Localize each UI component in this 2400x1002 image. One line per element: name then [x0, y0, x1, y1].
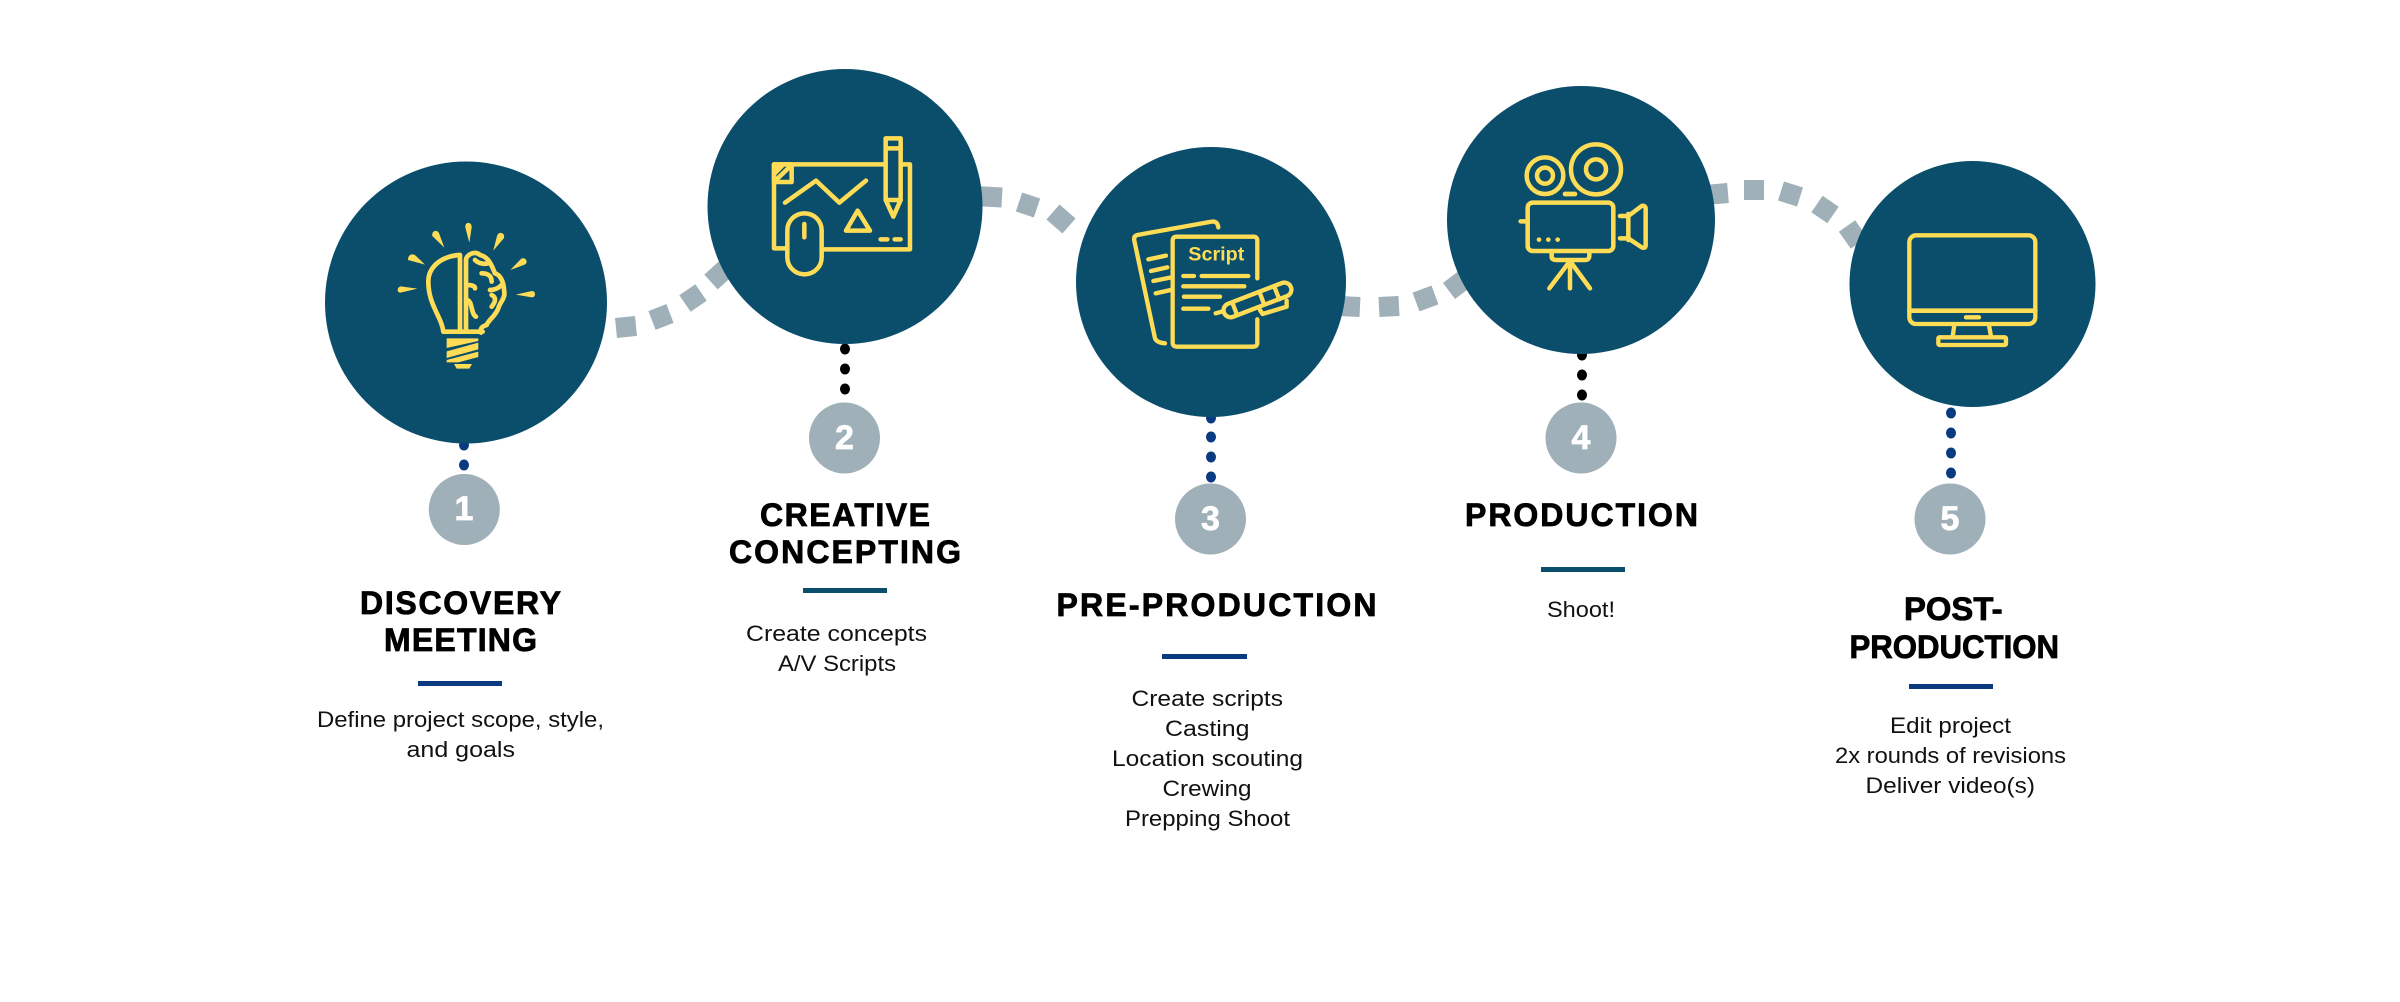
rule: step 4 — [1541, 567, 1625, 572]
number badge: 2 — [809, 402, 880, 474]
text block: step 1 description: Define project scope, style, — [317, 707, 604, 732]
text block: step 3 description: Crewing — [1162, 776, 1252, 801]
text block: step 1 description: and goals — [406, 737, 515, 762]
icon: design board with pencil and mouse — [774, 138, 910, 274]
dotted line: step 5 — [1946, 408, 1956, 478]
text block: step 3 description: Create scripts — [1132, 686, 1283, 711]
rule: step 3 — [1162, 654, 1247, 659]
icon: script pages and pen — [1134, 222, 1293, 347]
number badge: 5: 5 — [1941, 500, 1959, 538]
circle: step 3 — [1076, 147, 1346, 417]
heading: discovery meeting — [360, 585, 561, 658]
text block: step 3 description: Location scouting — [1112, 746, 1303, 771]
circle: step 2 — [708, 69, 982, 344]
number badge: 2: 2 — [835, 419, 854, 457]
text block: step 4 description: Shoot! — [1547, 597, 1615, 622]
dotted line: step 3 — [1206, 412, 1216, 482]
rule: step 2 — [803, 588, 887, 593]
dashed connector: step 3 to step 4 — [1340, 275, 1470, 307]
icon: film camera on tripod — [1521, 144, 1646, 288]
dotted line: step 4 — [1577, 350, 1587, 400]
heading: production: PRODUCTION — [1465, 497, 1698, 533]
heading: post-production — [1850, 591, 2059, 665]
text block: step 3 description — [1112, 686, 1303, 831]
heading: creative concepting: CONCEPTING — [729, 534, 961, 570]
text block: step 3 description: Casting — [1165, 716, 1250, 741]
panel: step 2 creative concepting — [708, 69, 982, 676]
heading: discovery meeting: MEETING — [384, 622, 537, 658]
panel: step 1 discovery meeting — [317, 162, 607, 762]
dashed connector: step 4 to step 5 — [1705, 190, 1859, 243]
number badge: 4 — [1546, 402, 1616, 474]
dotted line: step 2 — [840, 344, 850, 394]
panel: step 5 post-production — [1835, 161, 2096, 798]
dotted line: step 1 — [459, 440, 469, 470]
number badge: 4: 4 — [1572, 419, 1591, 457]
rule: step 5 — [1909, 684, 1993, 689]
number badge: 1 — [429, 474, 500, 545]
icon: computer monitor — [1909, 235, 2035, 345]
number badge: 3 — [1175, 484, 1246, 554]
number badge: 5 — [1914, 484, 1986, 554]
text block: step 5 description — [1835, 713, 2066, 798]
number badge: 3: 3 — [1201, 500, 1220, 538]
icon: script pages and pen: Script — [1188, 245, 1245, 266]
text block: step 2 description — [746, 621, 927, 676]
circle: step 1 — [325, 162, 607, 444]
heading: post-production: PRODUCTION — [1850, 629, 2059, 665]
heading: creative concepting — [729, 497, 961, 570]
text block: step 5 description: 2x rounds of revisions — [1835, 743, 2066, 768]
text block: step 1 description — [317, 707, 604, 762]
icon: light bulb with brain — [398, 223, 535, 369]
rule: step 1 — [418, 681, 502, 686]
text block: step 2 description: Create concepts — [746, 621, 927, 646]
panel: step 3 pre-production — [1056, 147, 1376, 831]
text block: step 2 description: A/V Scripts — [778, 651, 896, 676]
panel: step 4 production — [1447, 86, 1715, 622]
circle: step 4 — [1447, 86, 1715, 354]
text block: step 5 description: Edit project — [1890, 713, 2011, 738]
text block: step 3 description: Prepping Shoot — [1125, 806, 1290, 831]
heading: creative concepting: CREATIVE — [760, 497, 930, 533]
heading: post-production: POST- — [1904, 591, 2002, 627]
number badge: 1: 1 — [455, 490, 473, 528]
heading: discovery meeting: DISCOVERY — [360, 585, 561, 621]
circle: step 5 — [1850, 161, 2096, 407]
heading: pre-production: PRE-PRODUCTION — [1056, 587, 1376, 623]
dashed connector: step 1 to step 2 — [616, 262, 733, 328]
dashed connector: step 2 to step 3 — [975, 196, 1069, 226]
text block: step 5 description: Deliver video(s) — [1866, 773, 2035, 798]
